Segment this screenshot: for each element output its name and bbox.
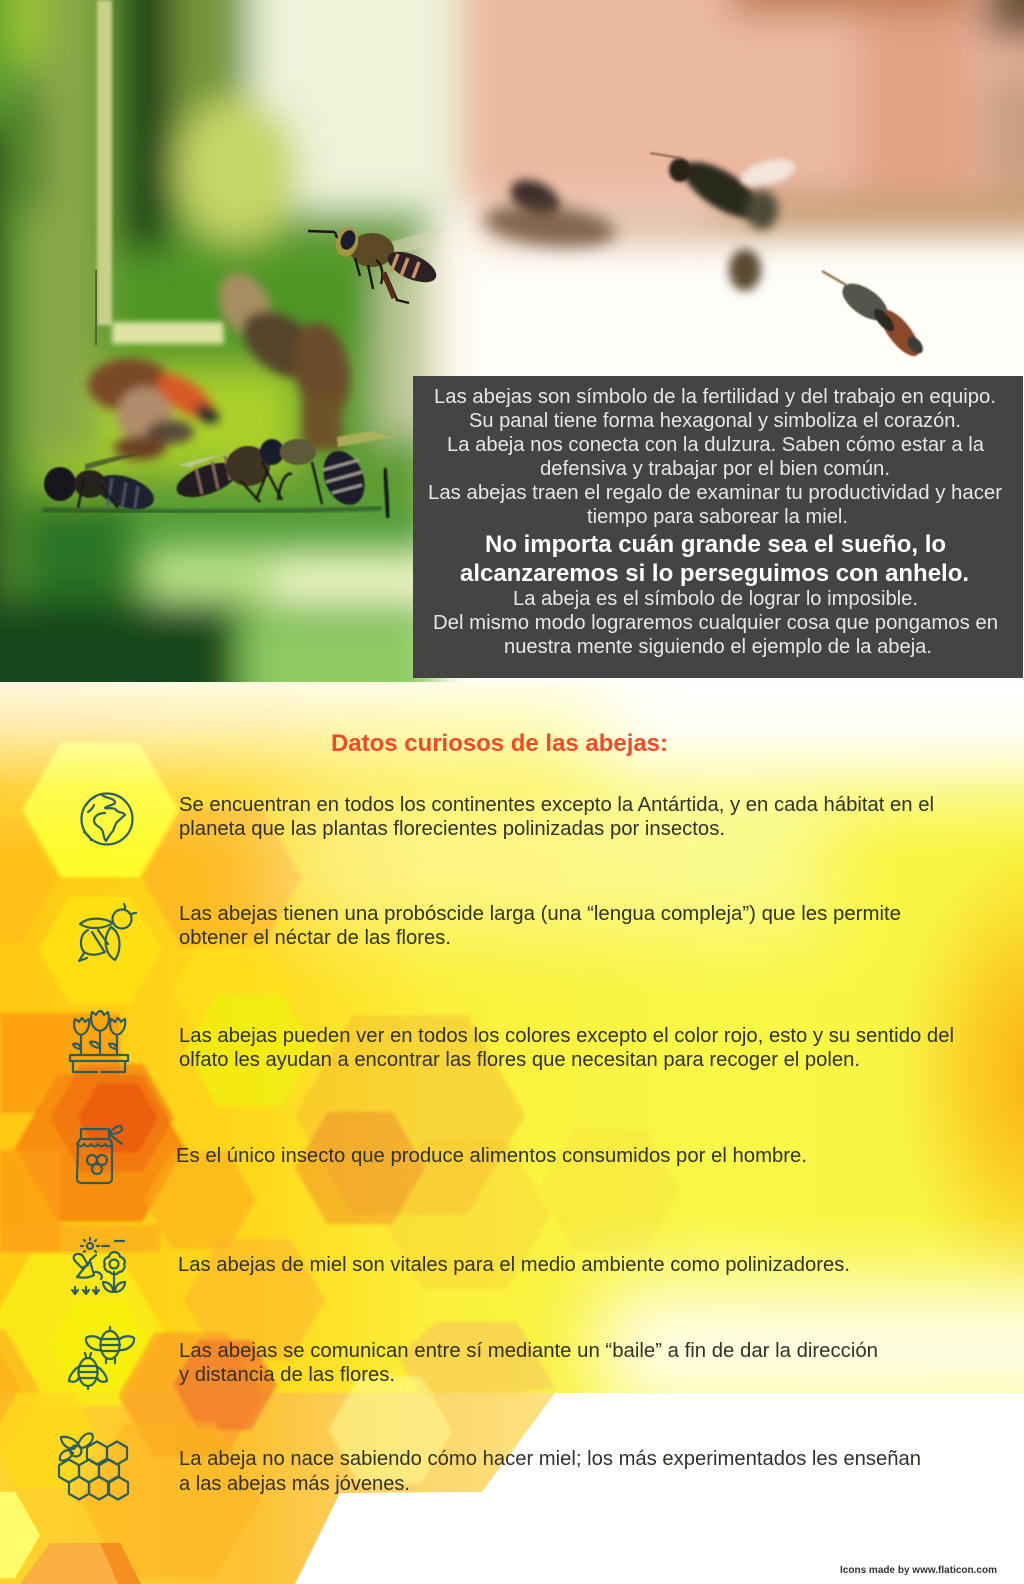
fact 1 (82, 794, 934, 844)
icon: pollination (72, 1238, 125, 1294)
fact 5 (72, 1238, 850, 1294)
fact 2 text: obtener el néctar de las flores. (179, 927, 451, 949)
fact 7 (59, 1433, 921, 1500)
icon: honeycomb with bee (59, 1433, 128, 1500)
flying bee in focus (308, 225, 447, 303)
photo: bees at the hive (0, 0, 1024, 740)
fact 1 text (179, 794, 934, 840)
icon: honey jar (77, 1126, 122, 1183)
fact 3 text: olfato les ayudan a encontrar las flores que necesitan para recoger el polen. (179, 1049, 860, 1071)
fact 6 text (179, 1340, 878, 1386)
fact 7 text: a las abejas más jóvenes. (179, 1473, 410, 1495)
bee lower right (822, 271, 926, 362)
panel paragraph 2 (433, 588, 998, 658)
panel paragraph 1: La abeja nos conecta con la dulzura. Saben cómo estar a la (447, 434, 985, 456)
fact 2 text (179, 903, 901, 949)
icon: flower pot (70, 1011, 128, 1072)
panel paragraph 2: La abeja es el símbolo de lograr lo imposible. (513, 588, 918, 610)
honeycomb background (0, 600, 1024, 1584)
icon: globe (82, 794, 132, 844)
fact 7 text (179, 1448, 921, 1495)
icon: two bees (69, 1327, 134, 1389)
panel highlighted quote: alcanzaremos si lo perseguimos con anhelo. (460, 560, 969, 587)
attribution footer: Icons made by www.flaticon.com (840, 1565, 997, 1576)
fact 3 (70, 1011, 954, 1072)
fact 6 (69, 1327, 878, 1389)
panel paragraph 1: Su panal tiene forma hexagonal y simboliza el corazón. (469, 410, 961, 432)
panel highlighted quote: No importa cuán grande sea el sueño, lo (485, 531, 946, 558)
fact 6 text: Las abejas se comunican entre sí mediante un “baile” a fin de dar la dirección (179, 1340, 878, 1362)
hive post and ledge (42, 0, 388, 516)
fact 7 text: La abeja no nace sabiendo cómo hacer miel; los más experimentados les enseñan (179, 1448, 921, 1470)
blurred bee top right (482, 151, 798, 291)
panel paragraph 2: nuestra mente siguiendo el ejemplo de la abeja. (504, 636, 932, 658)
panel paragraph 1: Las abejas traen el regalo de examinar tu productividad y hacer (428, 482, 1002, 504)
panel paragraph 1: tiempo para saborear la miel. (587, 506, 848, 528)
fact 3 text (179, 1025, 954, 1071)
fact 3 text: Las abejas pueden ver en todos los colores excepto el color rojo, esto y su sentido del (179, 1025, 954, 1047)
fact 2 text: Las abejas tienen una probóscide larga (una “lengua compleja”) que les permite (179, 903, 901, 925)
panel paragraph 1 (428, 386, 1002, 528)
fact 1 text: planeta que las plantas florecientes polinizadas por insectos. (179, 818, 725, 840)
panel paragraph 2: Del mismo modo lograremos cualquier cosa que pongamos en (433, 612, 998, 634)
fact 4 text: Es el único insecto que produce alimentos consumidos por el hombre. (176, 1145, 807, 1167)
fact 6 text: y distancia de las flores. (179, 1364, 395, 1386)
panel paragraph 1: defensiva y trabajar por el bien común. (540, 458, 890, 480)
fact 2 (79, 903, 901, 961)
icon: bee (79, 904, 136, 961)
blurred bees on hive (88, 264, 357, 460)
fact 4 (77, 1126, 807, 1183)
title: Datos curiosos de las abejas: (331, 730, 668, 757)
sharp bees on ledge (44, 431, 393, 516)
fact 1 text: Se encuentran en todos los continentes excepto la Antártida, y en cada hábitat en el (179, 794, 934, 816)
panel paragraph 1: Las abejas son símbolo de la fertilidad y del trabajo en equipo. (434, 386, 996, 408)
dark text panel (413, 376, 1023, 678)
fact 5 text: Las abejas de miel son vitales para el medio ambiente como polinizadores. (178, 1254, 850, 1276)
panel highlighted quote (460, 531, 969, 587)
